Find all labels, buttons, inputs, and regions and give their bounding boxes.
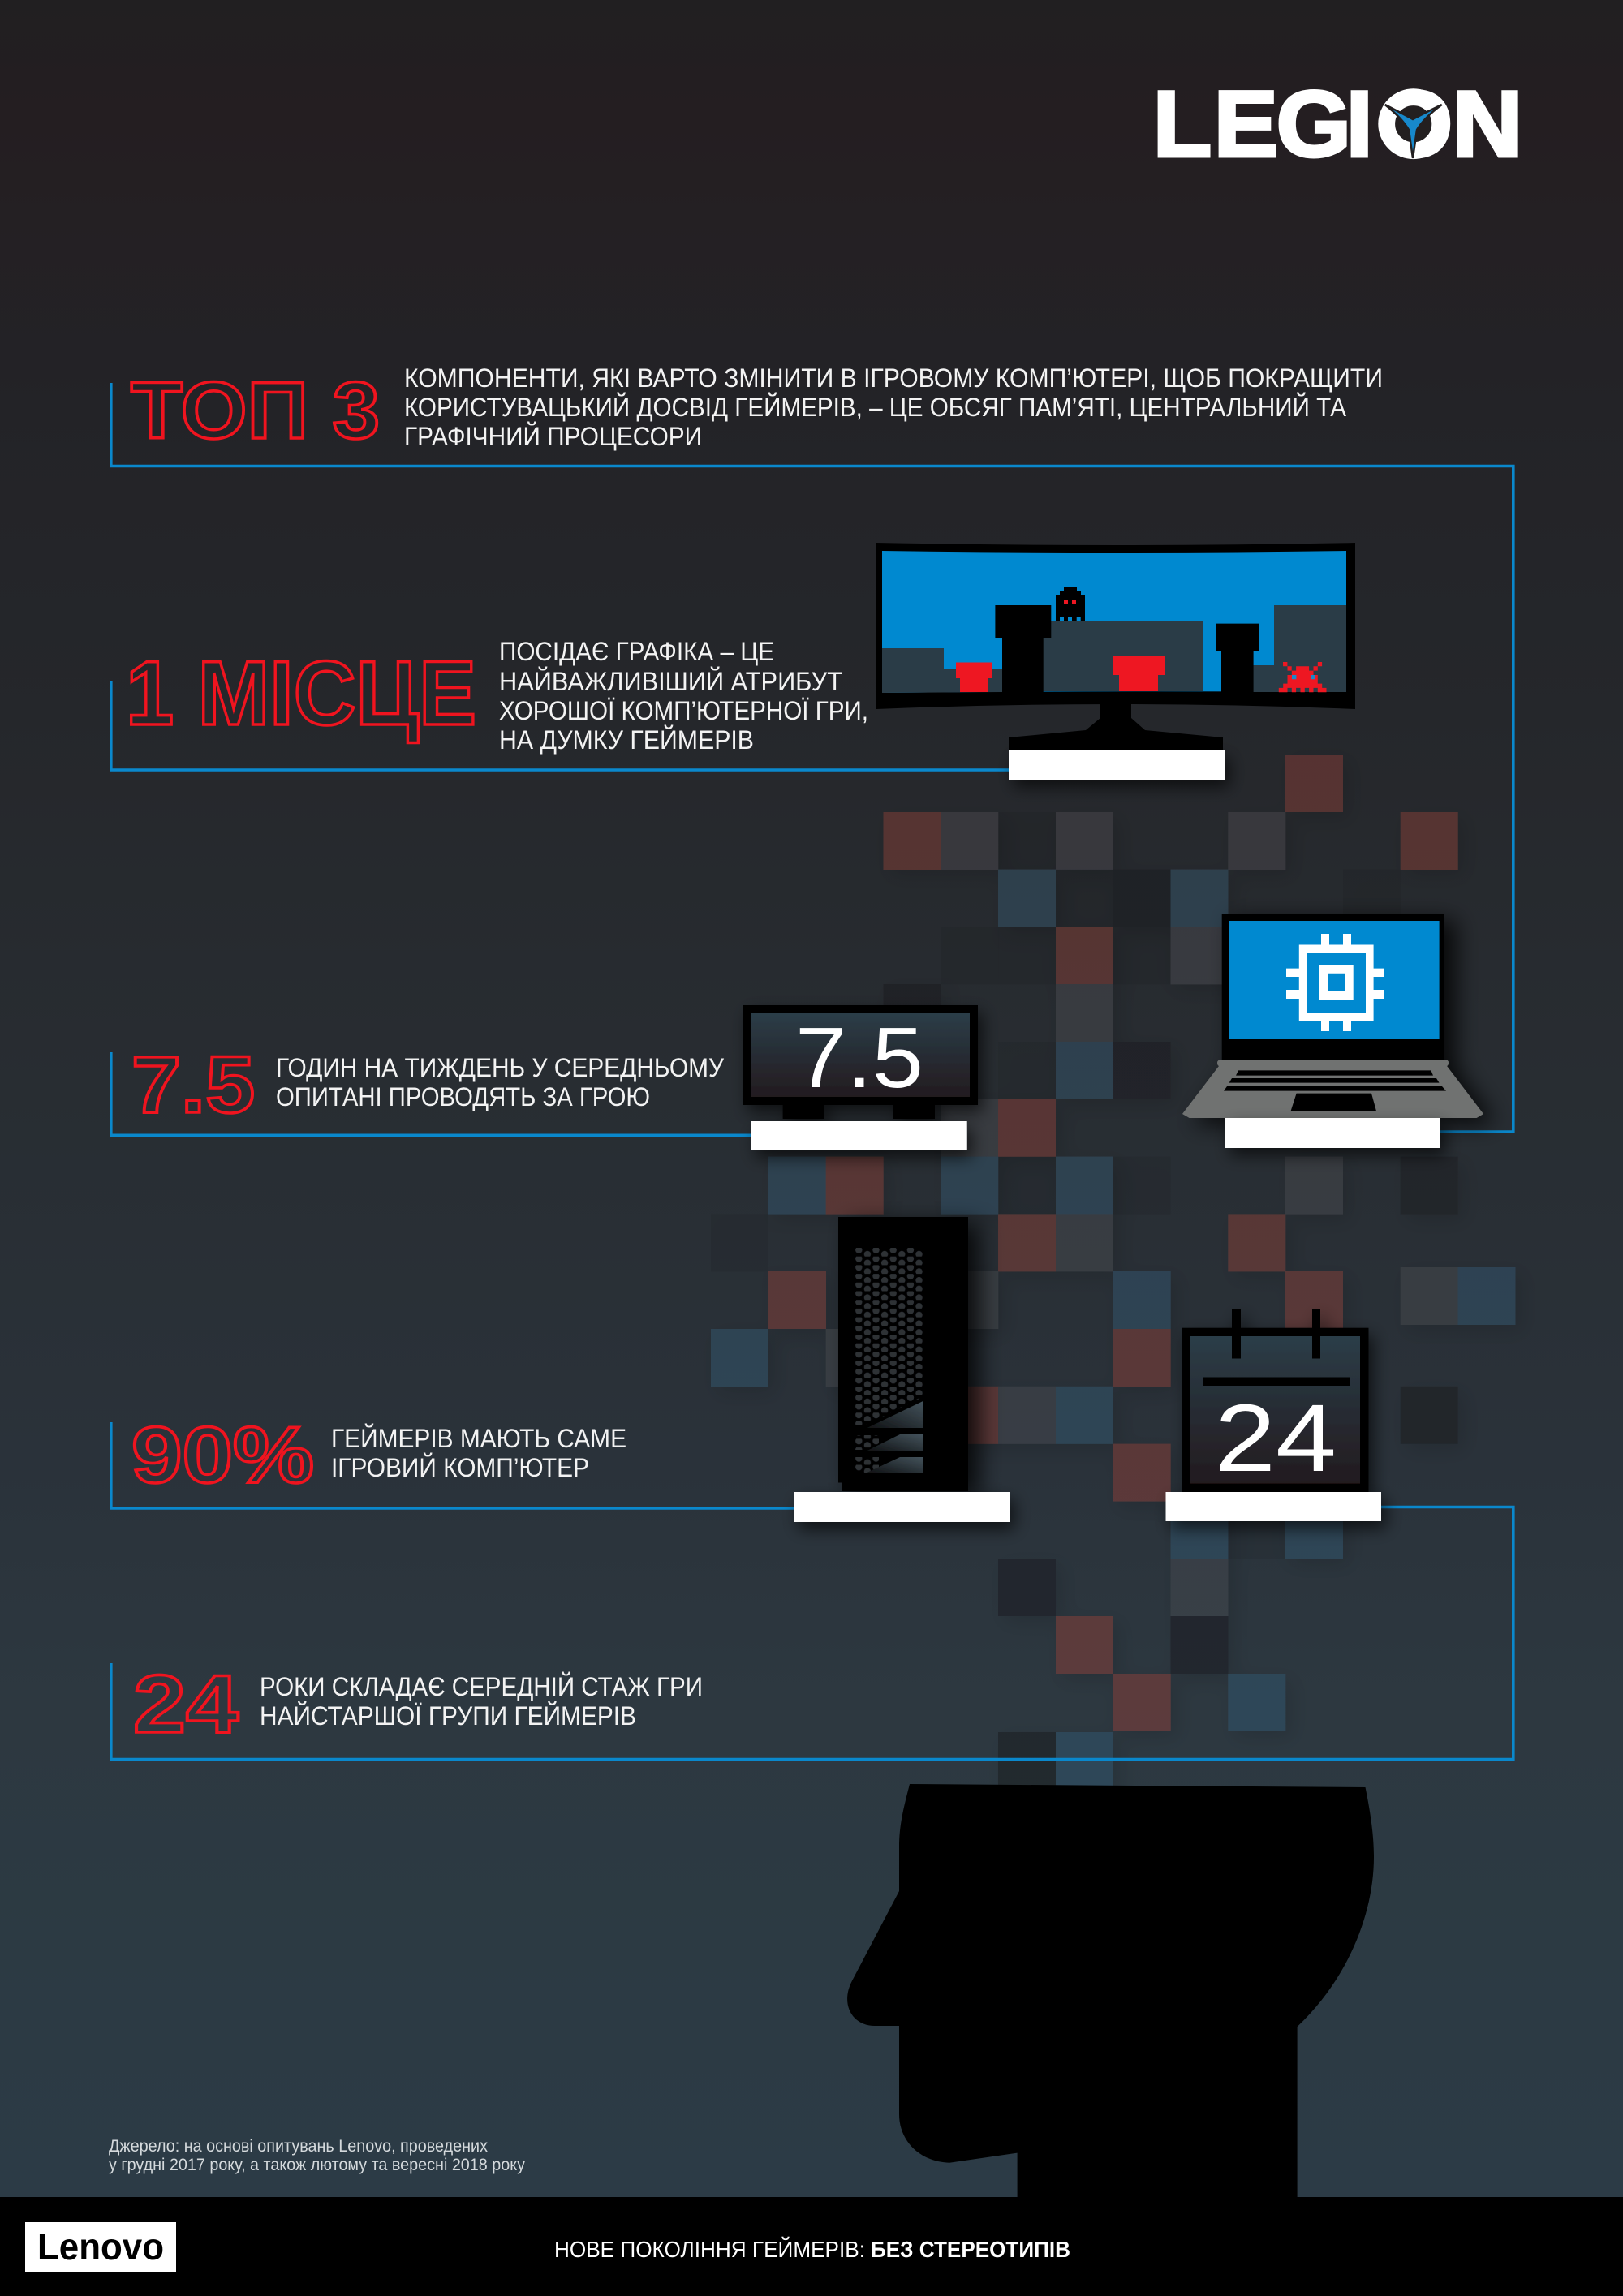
heading: 7.5: 7.5 bbox=[131, 1039, 255, 1129]
shelf: monitor bbox=[1009, 750, 1225, 780]
text: first place description: НА ДУМКУ ГЕЙМЕРІВ bbox=[499, 724, 754, 755]
pixel tiles rising from the head bbox=[711, 755, 1516, 1790]
text: first place description: ХОРОШОЇ КОМП’ЮТЕРНОЇ ГРИ, bbox=[499, 696, 868, 725]
logo: Legion: LEGION bbox=[1153, 71, 1522, 176]
icon: gaming tower bbox=[838, 1217, 968, 1491]
shelf: tower bbox=[794, 1492, 1010, 1522]
shelf: display bbox=[751, 1121, 967, 1150]
panel: top 3 bbox=[131, 363, 1383, 455]
heading: top 3: ТОП 3 bbox=[131, 365, 380, 455]
text: 24 years description bbox=[260, 1671, 703, 1731]
frame line: 90 percent bbox=[111, 1422, 794, 1508]
footer tagline bbox=[554, 2237, 1070, 2262]
text: hours description: ОПИТАНІ ПРОВОДЯТЬ ЗА ГРОЮ bbox=[276, 1082, 650, 1111]
text: source note: у грудні 2017 року, а також лютому та вересні 2018 року bbox=[109, 2156, 525, 2174]
text: 90 percent description: ГЕЙМЕРІВ МАЮТЬ САМЕ bbox=[331, 1423, 626, 1453]
icon: calendar bbox=[1182, 1309, 1368, 1493]
text: source note: Джерело: на основі опитувань Lenovo, проведених bbox=[109, 2137, 488, 2156]
panel: 90 percent bbox=[131, 1410, 626, 1499]
text: 24 years description: РОКИ СКЛАДАЄ СЕРЕДНІЙ СТАЖ ГРИ bbox=[260, 1671, 703, 1701]
frame line: first place bbox=[111, 681, 1009, 770]
calendar value: 24 bbox=[1215, 1385, 1337, 1492]
heading: 24: 24 bbox=[133, 1659, 239, 1750]
icon: hours display bbox=[743, 1005, 978, 1119]
text: hours description: ГОДИН НА ТИЖДЕНЬ У СЕРЕДНЬОМУ bbox=[276, 1053, 724, 1082]
text: first place description: ПОСІДАЄ ГРАФІКА – ЦЕ bbox=[499, 637, 774, 666]
text: top 3 description: ГРАФІЧНИЙ ПРОЦЕСОРИ bbox=[404, 421, 702, 451]
text: 24 years description: НАЙСТАРШОЇ ГРУПИ ГЕЙМЕРІВ bbox=[260, 1701, 636, 1731]
panel: first place bbox=[126, 637, 868, 755]
panel: hours per week bbox=[131, 1039, 724, 1129]
icon: laptop with processor bbox=[1182, 914, 1483, 1118]
text: top 3 description: КОМПОНЕНТИ, ЯКІ ВАРТО ЗМІНИТИ В ІГРОВОМУ КОМП’ЮТЕРІ, ЩОБ ПОКРАЩИТИ bbox=[404, 363, 1383, 393]
icon: head silhouette bbox=[847, 1784, 1374, 2199]
heading: 90%: 90% bbox=[131, 1410, 314, 1499]
heading: 1st place: 1 МІСЦЕ bbox=[126, 643, 476, 744]
frame line: top 3 bbox=[111, 383, 1513, 1132]
text: top 3 description: КОРИСТУВАЦЬКИЙ ДОСВІД ГЕЙМЕРІВ, – ЦЕ ОБСЯГ ПАМ’ЯТІ, ЦЕНТРАЛЬНИЙ ТА bbox=[404, 392, 1346, 422]
frame line: hours bbox=[111, 1052, 751, 1135]
text: 90 percent description bbox=[331, 1423, 626, 1482]
logo: Lenovo: Lenovo bbox=[37, 2225, 164, 2268]
text: first place description bbox=[499, 637, 868, 755]
shelf: laptop bbox=[1225, 1118, 1440, 1148]
text: hours description bbox=[276, 1053, 724, 1111]
icon: gaming monitor bbox=[876, 543, 1355, 750]
text: first place description: НАЙВАЖЛИВІШИЙ АТРИБУТ bbox=[499, 666, 842, 696]
text: source note bbox=[109, 2137, 525, 2174]
icon: processor chip bbox=[1286, 934, 1384, 1031]
footer bar bbox=[0, 2197, 1623, 2296]
frame line: 24 years bbox=[111, 1507, 1513, 1759]
text: 90 percent description: ІГРОВИЙ КОМП’ЮТЕР bbox=[331, 1452, 589, 1482]
shelf: calendar bbox=[1165, 1492, 1381, 1521]
footer tagline: НОВЕ ПОКОЛІННЯ ГЕЙМЕРІВ: bbox=[554, 2237, 865, 2262]
text: top 3 description bbox=[404, 363, 1383, 451]
footer tagline: БЕЗ СТЕРЕОТИПІВ bbox=[871, 2237, 1070, 2262]
panel: 24 years bbox=[133, 1659, 703, 1750]
display value: 7.5 bbox=[795, 1010, 923, 1106]
